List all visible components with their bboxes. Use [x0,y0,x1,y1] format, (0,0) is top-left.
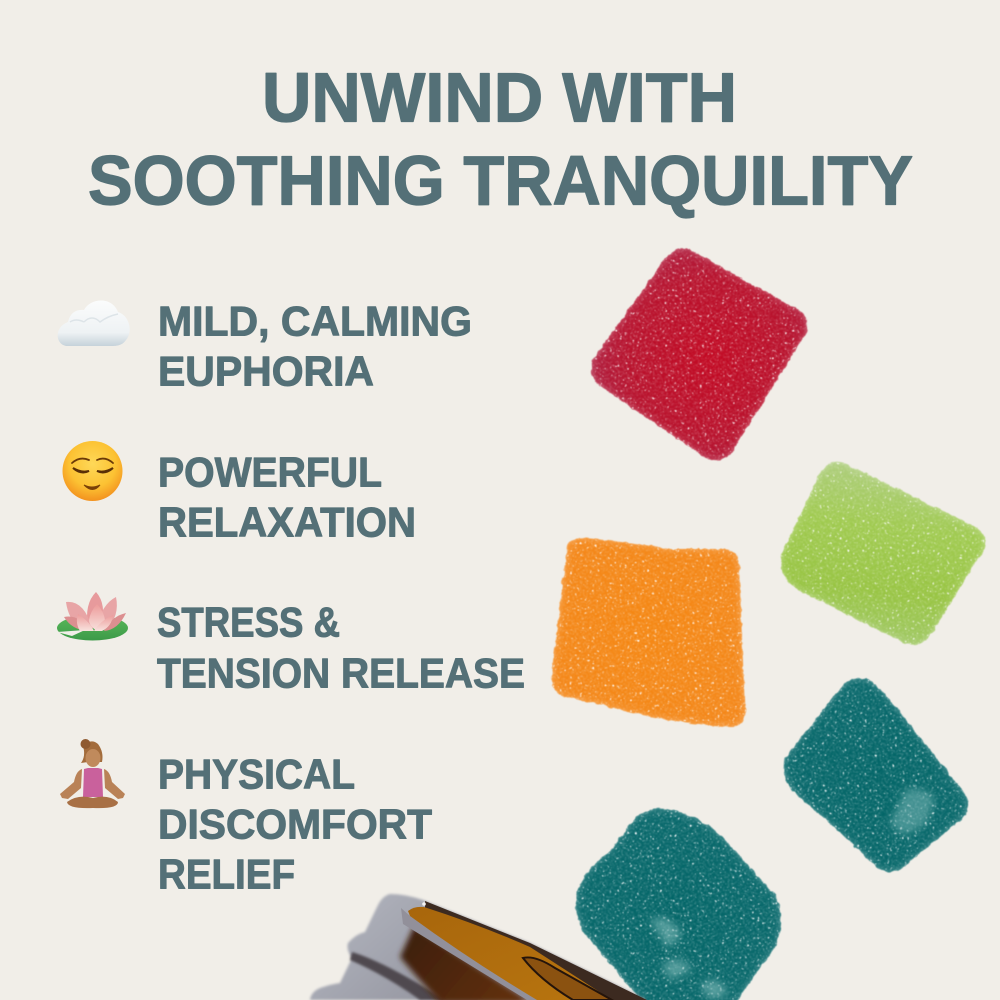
benefit: physical discomfort relief [60,739,432,898]
label: MILD, CALMING [158,298,472,344]
label: RELAXATION [158,498,416,546]
label: DISCOMFORT [158,800,432,848]
jar neck shadow [350,952,445,1000]
jar brown body [400,926,532,1000]
label [158,298,472,394]
title [88,58,913,220]
icon: lotus on lily pad [57,592,128,640]
label: EUPHORIA [158,348,374,394]
gummy: orange [552,538,745,727]
icon: cloud [58,300,130,346]
jar inner reflection [523,957,612,1000]
benefit: mild, calming euphoria [58,298,472,394]
label: PHYSICAL [158,750,355,798]
label [157,598,525,696]
benefit: powerful relaxation [62,441,416,546]
label [158,750,432,898]
label: POWERFUL [158,448,382,496]
icon: meditating person [60,739,125,808]
label: RELIEF [158,850,295,898]
gummy: red [591,248,807,461]
gummy: teal bottom [576,808,781,1000]
title: UNWIND WITH [262,58,737,136]
label: STRESS & [157,598,340,646]
jar highlight [422,902,426,906]
benefit: stress and tension release [57,592,525,696]
jar lip [401,908,540,1000]
jar dark rim [425,901,647,1000]
glass jar [310,894,647,1000]
gummy: teal right [784,678,968,872]
icon: relieved face [62,441,122,501]
label [158,448,416,546]
jar shoulder: frosted glare [310,894,647,1000]
jar amber interior [408,907,612,1000]
gummy: green [781,462,985,645]
label: TENSION RELEASE [157,650,525,696]
title: SOOTHING TRANQUILITY [88,142,913,220]
